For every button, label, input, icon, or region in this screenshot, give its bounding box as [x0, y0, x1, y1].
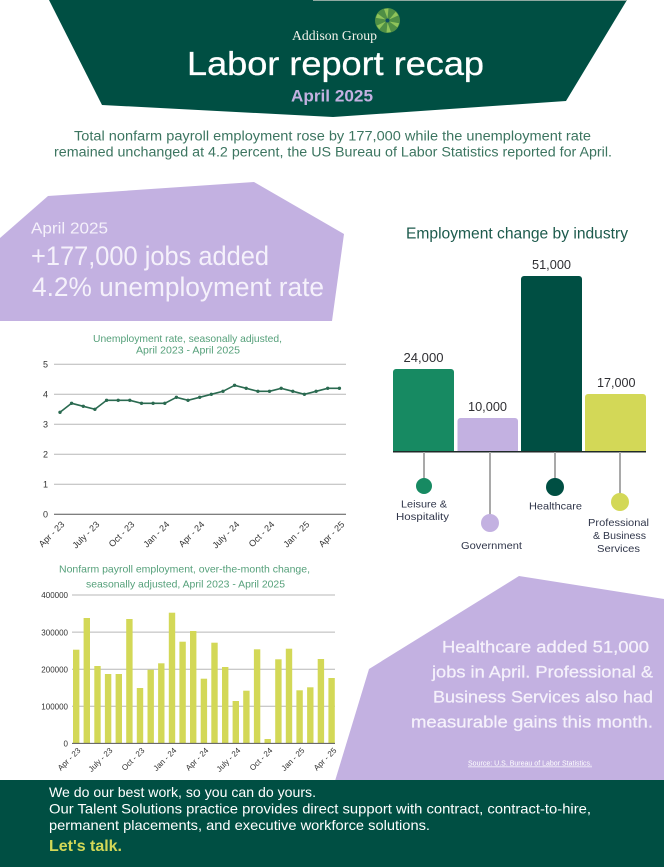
- subtitle date: April 2025: [291, 88, 373, 106]
- legend: healthcare: Healthcare: [529, 500, 582, 512]
- x axis labels: July - 24: [210, 519, 241, 550]
- logo wordmark: Addison Group: [292, 29, 377, 44]
- stat date: April 2025: [31, 220, 108, 238]
- stat: jobs added: +177,000 jobs added: [31, 241, 269, 271]
- x axis labels: Oct - 24: [247, 519, 276, 549]
- bar: leisure and hospitality: [393, 350, 454, 452]
- y axis labels: 300000: [41, 628, 69, 638]
- x axis labels: Jan - 24: [152, 746, 179, 773]
- chart title: [93, 333, 282, 356]
- data line: [60, 385, 339, 412]
- legend: government: [461, 452, 522, 552]
- callout text: Business Services also had: [433, 688, 653, 706]
- y axis labels: 5: [43, 360, 48, 370]
- bars: [73, 613, 335, 743]
- y axis labels: 400000: [41, 591, 69, 600]
- source note: Source: U.S. Bureau of Labor Statistics.: [468, 760, 592, 768]
- footer message: Our Talent Solutions practice provides direct support with contract, contract-to-hire,: [49, 800, 591, 816]
- x axis labels: [37, 519, 346, 550]
- intro text: [54, 128, 612, 160]
- y axis labels: 0: [43, 510, 48, 520]
- bar: healthcare: [521, 257, 582, 452]
- data points: [58, 384, 341, 414]
- y axis labels: [43, 360, 48, 520]
- panel: healthcare callout: [335, 576, 664, 781]
- x axis labels: Jan - 24: [141, 519, 171, 549]
- panel: header banner: [49, 0, 627, 117]
- x axis labels: Apr - 23: [56, 746, 83, 773]
- intro text: remained unchanged at 4.2 percent, the US Bureau of Labor Statistics reported for April.: [54, 144, 612, 160]
- title: Labor report recap: [187, 45, 484, 82]
- legend: professional and business services: Professional: [588, 517, 649, 529]
- chart title: Nonfarm payroll employment, over-the-month change,: [59, 564, 310, 576]
- line chart: unemployment rate: [37, 333, 346, 550]
- y axis labels: [41, 591, 69, 748]
- stat: unemployment rate: 4.2% unemployment rate: [32, 272, 324, 302]
- x axis labels: Jan - 25: [281, 519, 311, 549]
- x axis labels: [56, 746, 339, 774]
- y axis labels: 0: [64, 740, 69, 748]
- panel: footer: [0, 780, 664, 867]
- callout text: jobs in April. Professional &: [431, 662, 654, 682]
- footer message: permanent placements, and executive workforce solutions.: [49, 817, 430, 833]
- legend: professional and business services: & Business: [593, 530, 646, 542]
- footer message: We do our best work, so you can do yours.: [49, 784, 316, 800]
- x axis labels: Oct - 23: [120, 746, 147, 773]
- y axis labels: 3: [43, 420, 48, 430]
- legend: government: Government: [461, 540, 522, 552]
- y axis labels: 200000: [41, 666, 69, 674]
- legend: leisure and hospitality: Hospitality: [396, 511, 450, 523]
- chart title: [59, 564, 310, 590]
- x axis labels: Apr - 24: [177, 519, 206, 549]
- x axis labels: Apr - 23: [37, 519, 66, 549]
- call to action: Let's talk.: [49, 838, 122, 855]
- x axis labels: July - 23: [87, 746, 115, 774]
- bar: healthcare: 51,000: [532, 257, 571, 272]
- callout text: measurable gains this month.: [411, 712, 653, 732]
- legend: leisure and hospitality: Leisure &: [401, 498, 447, 510]
- panel: employment change by industry: [393, 226, 649, 555]
- callout text: Healthcare added 51,000: [442, 638, 649, 656]
- x axis labels: Apr - 25: [317, 519, 346, 549]
- x axis labels: July - 24: [215, 746, 243, 774]
- bar: professional and business services: 17,000: [597, 375, 636, 390]
- bar: professional and business services: [585, 375, 646, 452]
- panel: headline stats: [0, 182, 344, 321]
- bar: government: [458, 399, 518, 452]
- x axis labels: Apr - 24: [184, 746, 211, 773]
- bar: leisure and hospitality: 24,000: [404, 350, 444, 365]
- x axis labels: Oct - 24: [248, 746, 275, 773]
- x axis labels: July - 23: [70, 519, 101, 550]
- y axis labels: 100000: [41, 702, 69, 712]
- x axis labels: Oct - 23: [107, 519, 136, 549]
- y axis labels: 4: [43, 390, 48, 400]
- y axis labels: 2: [43, 450, 48, 460]
- legend: healthcare: [529, 452, 582, 512]
- bar: government: 10,000: [468, 399, 507, 414]
- callout text: [411, 638, 654, 732]
- chart title: Unemployment rate, seasonally adjusted,: [93, 333, 282, 345]
- legend: professional and business services: Services: [597, 543, 640, 555]
- chart title: seasonally adjusted, April 2023 - April 2025: [86, 578, 285, 590]
- icon: Addison Group logo: [375, 8, 400, 33]
- y axis labels: 1: [43, 480, 48, 490]
- footer message: [49, 784, 591, 833]
- legend: professional and business services: [588, 452, 649, 555]
- x axis labels: Apr - 25: [312, 746, 339, 773]
- x axis labels: Jan - 25: [280, 746, 307, 773]
- bar chart: nonfarm payroll employment: [41, 564, 339, 774]
- heading: Employment change by industry: [406, 226, 628, 242]
- intro text: Total nonfarm payroll employment rose by 177,000 while the unemployment rate: [74, 128, 591, 144]
- legend: leisure and hospitality: [396, 452, 450, 523]
- chart title: April 2023 - April 2025: [136, 344, 240, 356]
